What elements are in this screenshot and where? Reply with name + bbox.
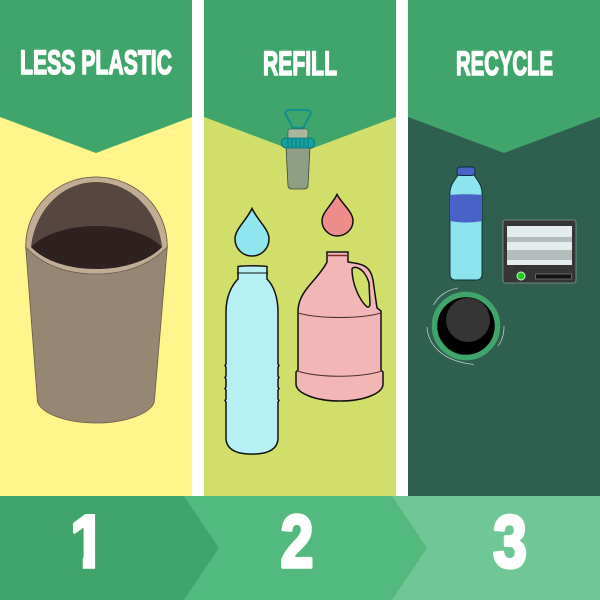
step 1 chevron [0,496,219,600]
icon: large clear bottle [225,266,279,454]
icon: trash bin [26,177,167,423]
icon: blue drop [235,208,269,256]
icon: water bottle [450,167,482,280]
machine status light [517,272,525,280]
banner: refill [204,0,396,153]
banner: less plastic [0,0,192,153]
panel: refill [204,0,396,496]
icon: recycling hole [427,288,504,364]
step band [0,496,600,600]
icon: reusable tumbler [282,110,314,189]
icon: recycling machine [503,220,576,283]
heading: less plastic: LESS PLASTIC [20,44,172,82]
step number 1: 1 [70,500,106,583]
machine slot [536,274,572,279]
panel: less plastic [0,0,192,496]
icon: pink jug [296,252,383,401]
banner: recycle [408,0,600,153]
icon: pink drop [322,194,353,236]
step number 3: 3 [493,500,527,583]
machine screen [507,226,572,265]
step number 2: 2 [280,500,314,583]
heading: refill: REFILL [263,45,337,83]
panel: recycle [408,0,600,496]
step 2 chevron [184,496,427,600]
